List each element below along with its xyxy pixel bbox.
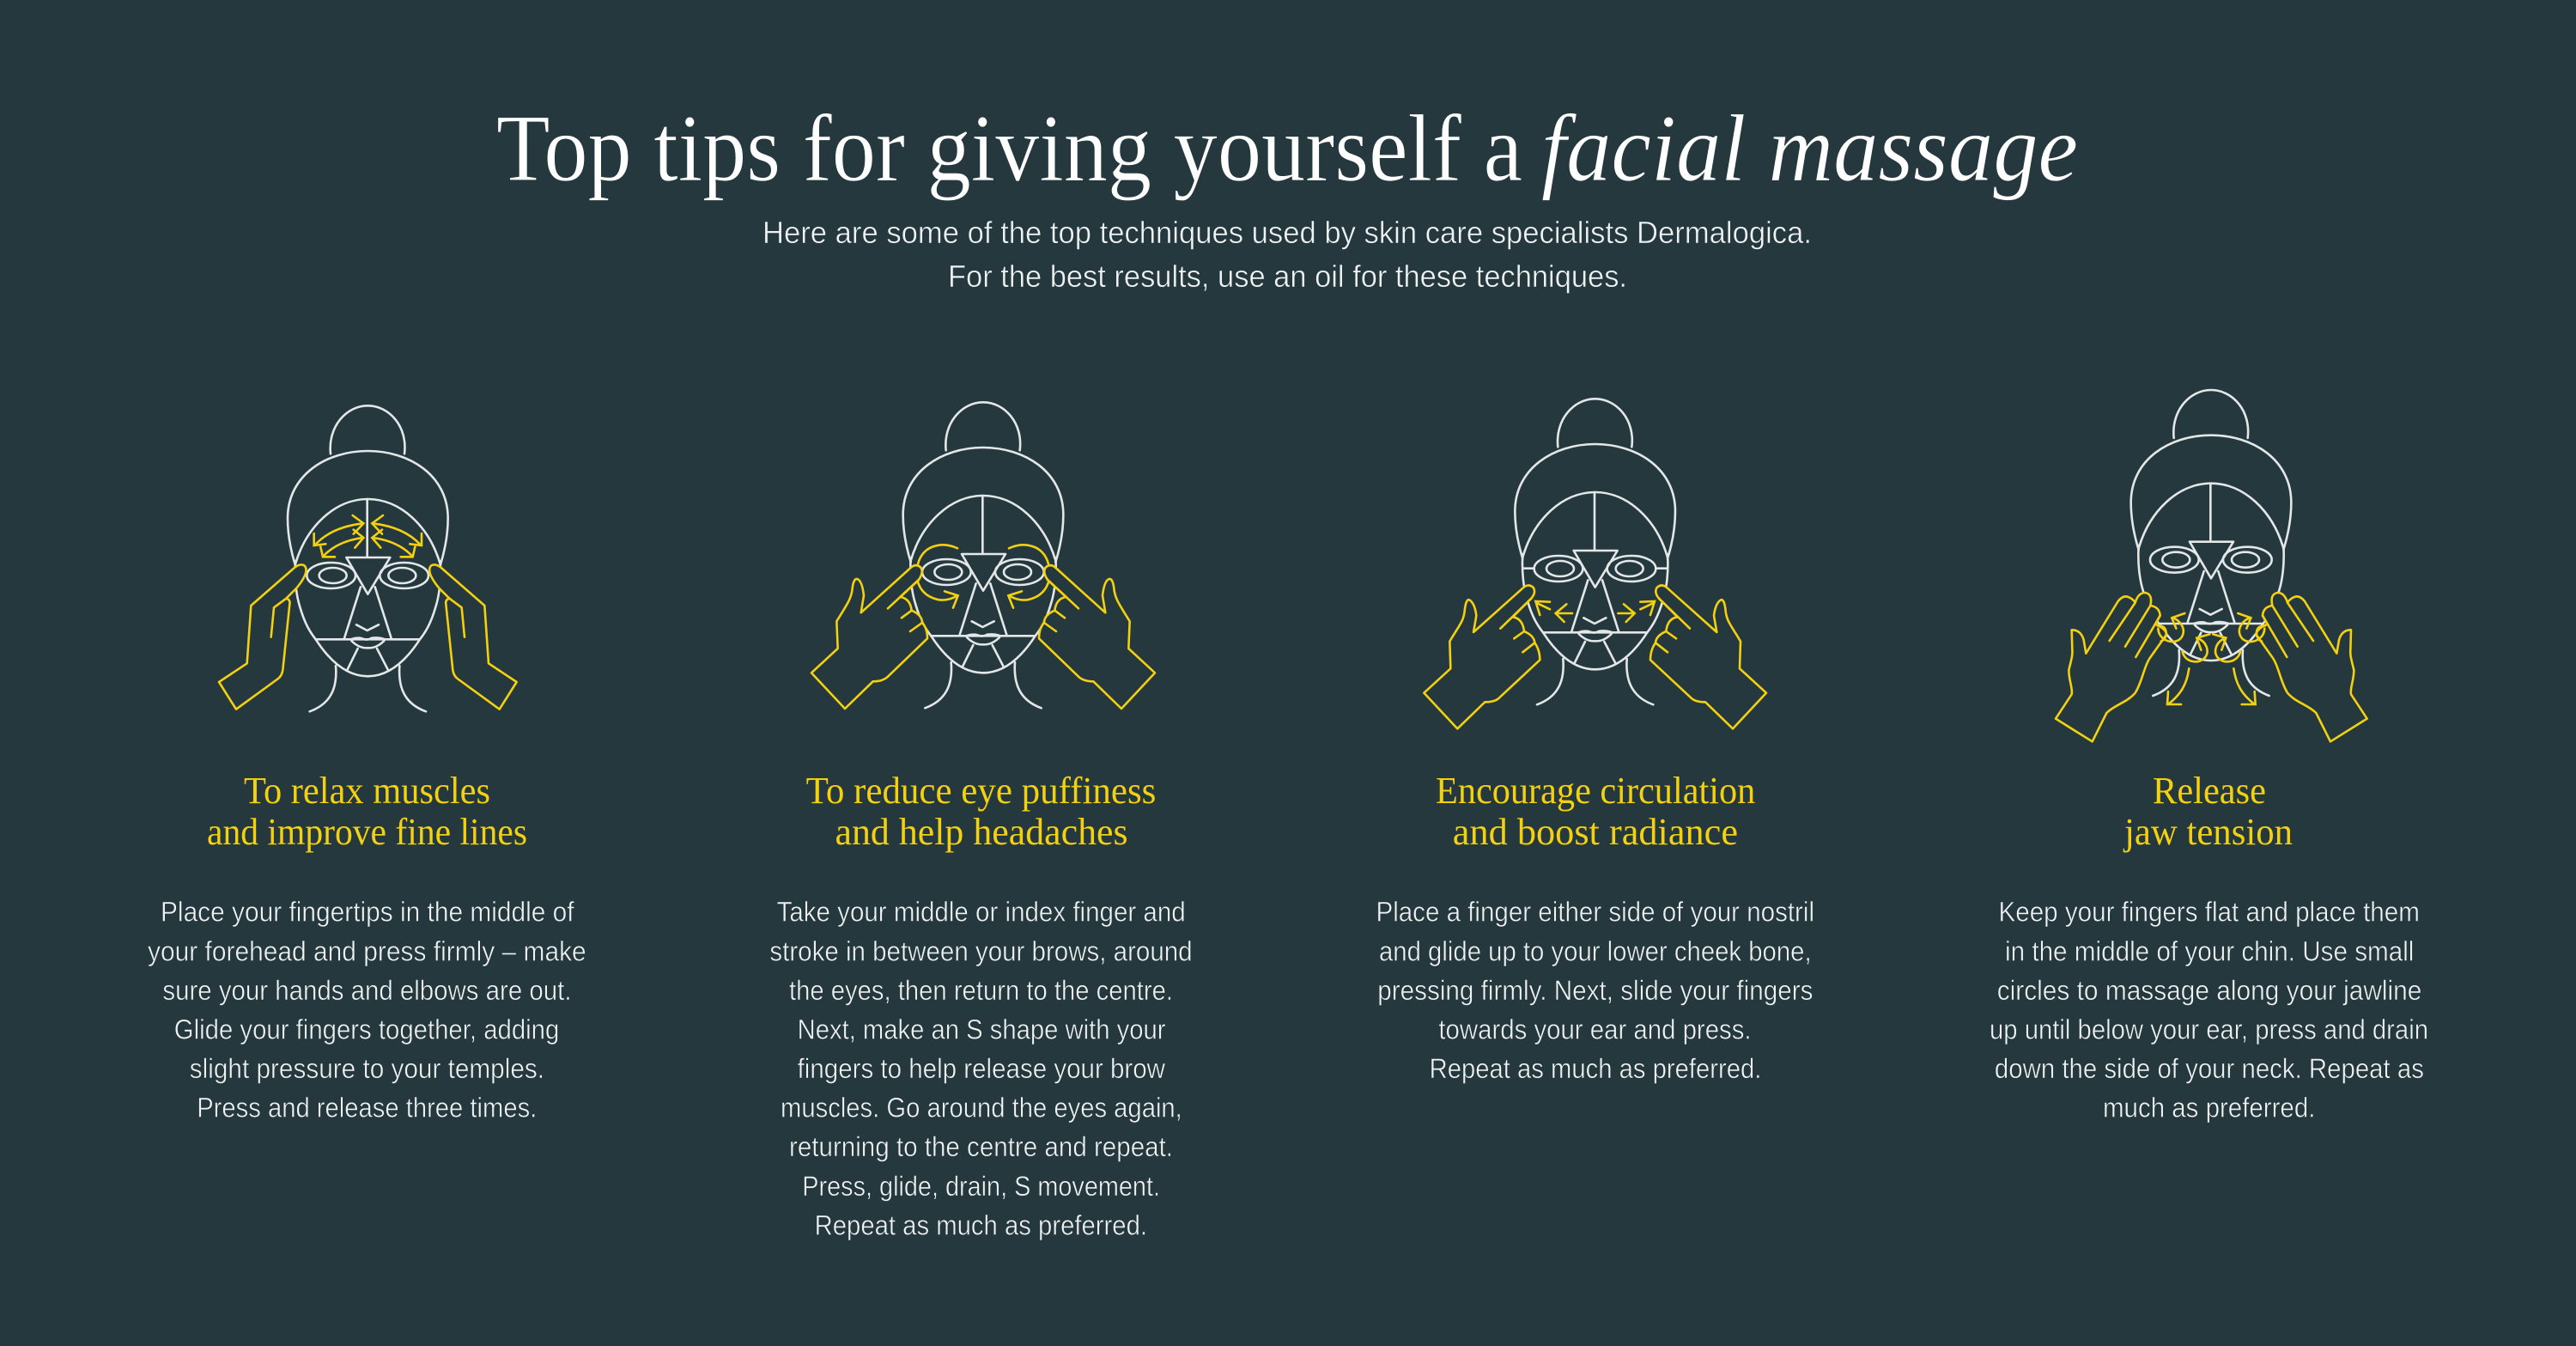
body text: eye puffiness: Take your middle or index finger and bbox=[777, 897, 1186, 928]
body text: relax muscles: sure your hands and elbows are out. bbox=[162, 975, 572, 1006]
body text: eye puffiness: returning to the centre and repeat. bbox=[789, 1131, 1173, 1162]
heading: jaw tension: Release bbox=[2153, 770, 2266, 812]
heading: circulation: and boost radiance bbox=[1453, 811, 1738, 853]
heading: circulation: Encourage circulation bbox=[1436, 770, 1755, 812]
body text: eye puffiness: the eyes, then return to the centre. bbox=[789, 975, 1173, 1006]
icon: face with hands at temples bbox=[219, 405, 517, 711]
body text: circulation bbox=[1376, 897, 1814, 1084]
body text: jaw tension: much as preferred. bbox=[2103, 1093, 2315, 1124]
heading: eye puffiness bbox=[806, 770, 1156, 853]
subtitle bbox=[762, 215, 1812, 294]
subtitle: Here are some of the top techniques used by skin care specialists Dermalogica. bbox=[762, 215, 1812, 250]
heading: eye puffiness: and help headaches bbox=[835, 811, 1128, 853]
body text: circulation: Place a finger either side of your nostril bbox=[1376, 897, 1814, 928]
body text: relax muscles: Glide your fingers together, adding bbox=[174, 1014, 559, 1045]
body text: eye puffiness: fingers to help release your brow bbox=[798, 1053, 1166, 1084]
body text: jaw tension: Keep your fingers flat and place them bbox=[1999, 897, 2420, 928]
body text: circulation: and glide up to your lower cheek bone, bbox=[1379, 935, 1812, 966]
subtitle: For the best results, use an oil for these techniques. bbox=[948, 259, 1627, 294]
body text: eye puffiness: stroke in between your brows, around bbox=[769, 935, 1193, 966]
body text: eye puffiness: Press, glide, drain, S movement. bbox=[802, 1171, 1160, 1202]
heading: eye puffiness: To reduce eye puffiness bbox=[806, 770, 1156, 812]
icon: face with fingers around the eyes bbox=[811, 402, 1155, 709]
body text: eye puffiness: Repeat as much as preferred. bbox=[815, 1209, 1147, 1240]
body text: jaw tension: circles to massage along your jawline bbox=[1997, 975, 2421, 1006]
body text: eye puffiness bbox=[769, 897, 1193, 1240]
title: Top tips for giving yourself a bbox=[496, 96, 1522, 202]
heading: jaw tension bbox=[2123, 770, 2293, 853]
body text: relax muscles: Press and release three times. bbox=[197, 1093, 537, 1124]
body text: circulation: pressing firmly. Next, slide your fingers bbox=[1377, 975, 1813, 1006]
body text: eye puffiness: muscles. Go around the eyes again, bbox=[781, 1093, 1182, 1124]
body text: jaw tension: in the middle of your chin. Use small bbox=[2005, 935, 2414, 966]
icon: face with fingers on cheeks bbox=[1424, 399, 1766, 728]
body text: jaw tension: up until below your ear, press and drain bbox=[1990, 1014, 2428, 1045]
body text: jaw tension: down the side of your neck. Repeat as bbox=[1995, 1053, 2424, 1084]
heading: jaw tension: jaw tension bbox=[2123, 811, 2293, 853]
body text: eye puffiness: Next, make an S shape with your bbox=[798, 1014, 1166, 1045]
body text: relax muscles: Place your fingertips in the middle of bbox=[161, 897, 574, 928]
heading: circulation bbox=[1436, 770, 1755, 853]
body text: relax muscles bbox=[148, 897, 586, 1124]
panel: relax muscles bbox=[148, 405, 586, 1124]
panel: circulation bbox=[1376, 399, 1814, 1084]
heading: relax muscles: To relax muscles bbox=[244, 770, 490, 812]
title: facial massage bbox=[1541, 96, 2078, 202]
body text: circulation: Repeat as much as preferred. bbox=[1430, 1053, 1761, 1084]
heading: relax muscles: and improve fine lines bbox=[207, 811, 527, 853]
body text: jaw tension bbox=[1990, 897, 2428, 1124]
body text: relax muscles: slight pressure to your temples. bbox=[190, 1053, 544, 1084]
panel: eye puffiness bbox=[769, 402, 1193, 1240]
body text: relax muscles: your forehead and press firmly – make bbox=[148, 935, 586, 966]
panel: jaw tension bbox=[1990, 390, 2428, 1124]
icon: face with hands on jaw bbox=[2056, 390, 2367, 741]
body text: circulation: towards your ear and press. bbox=[1438, 1014, 1752, 1045]
heading: relax muscles bbox=[207, 770, 527, 853]
